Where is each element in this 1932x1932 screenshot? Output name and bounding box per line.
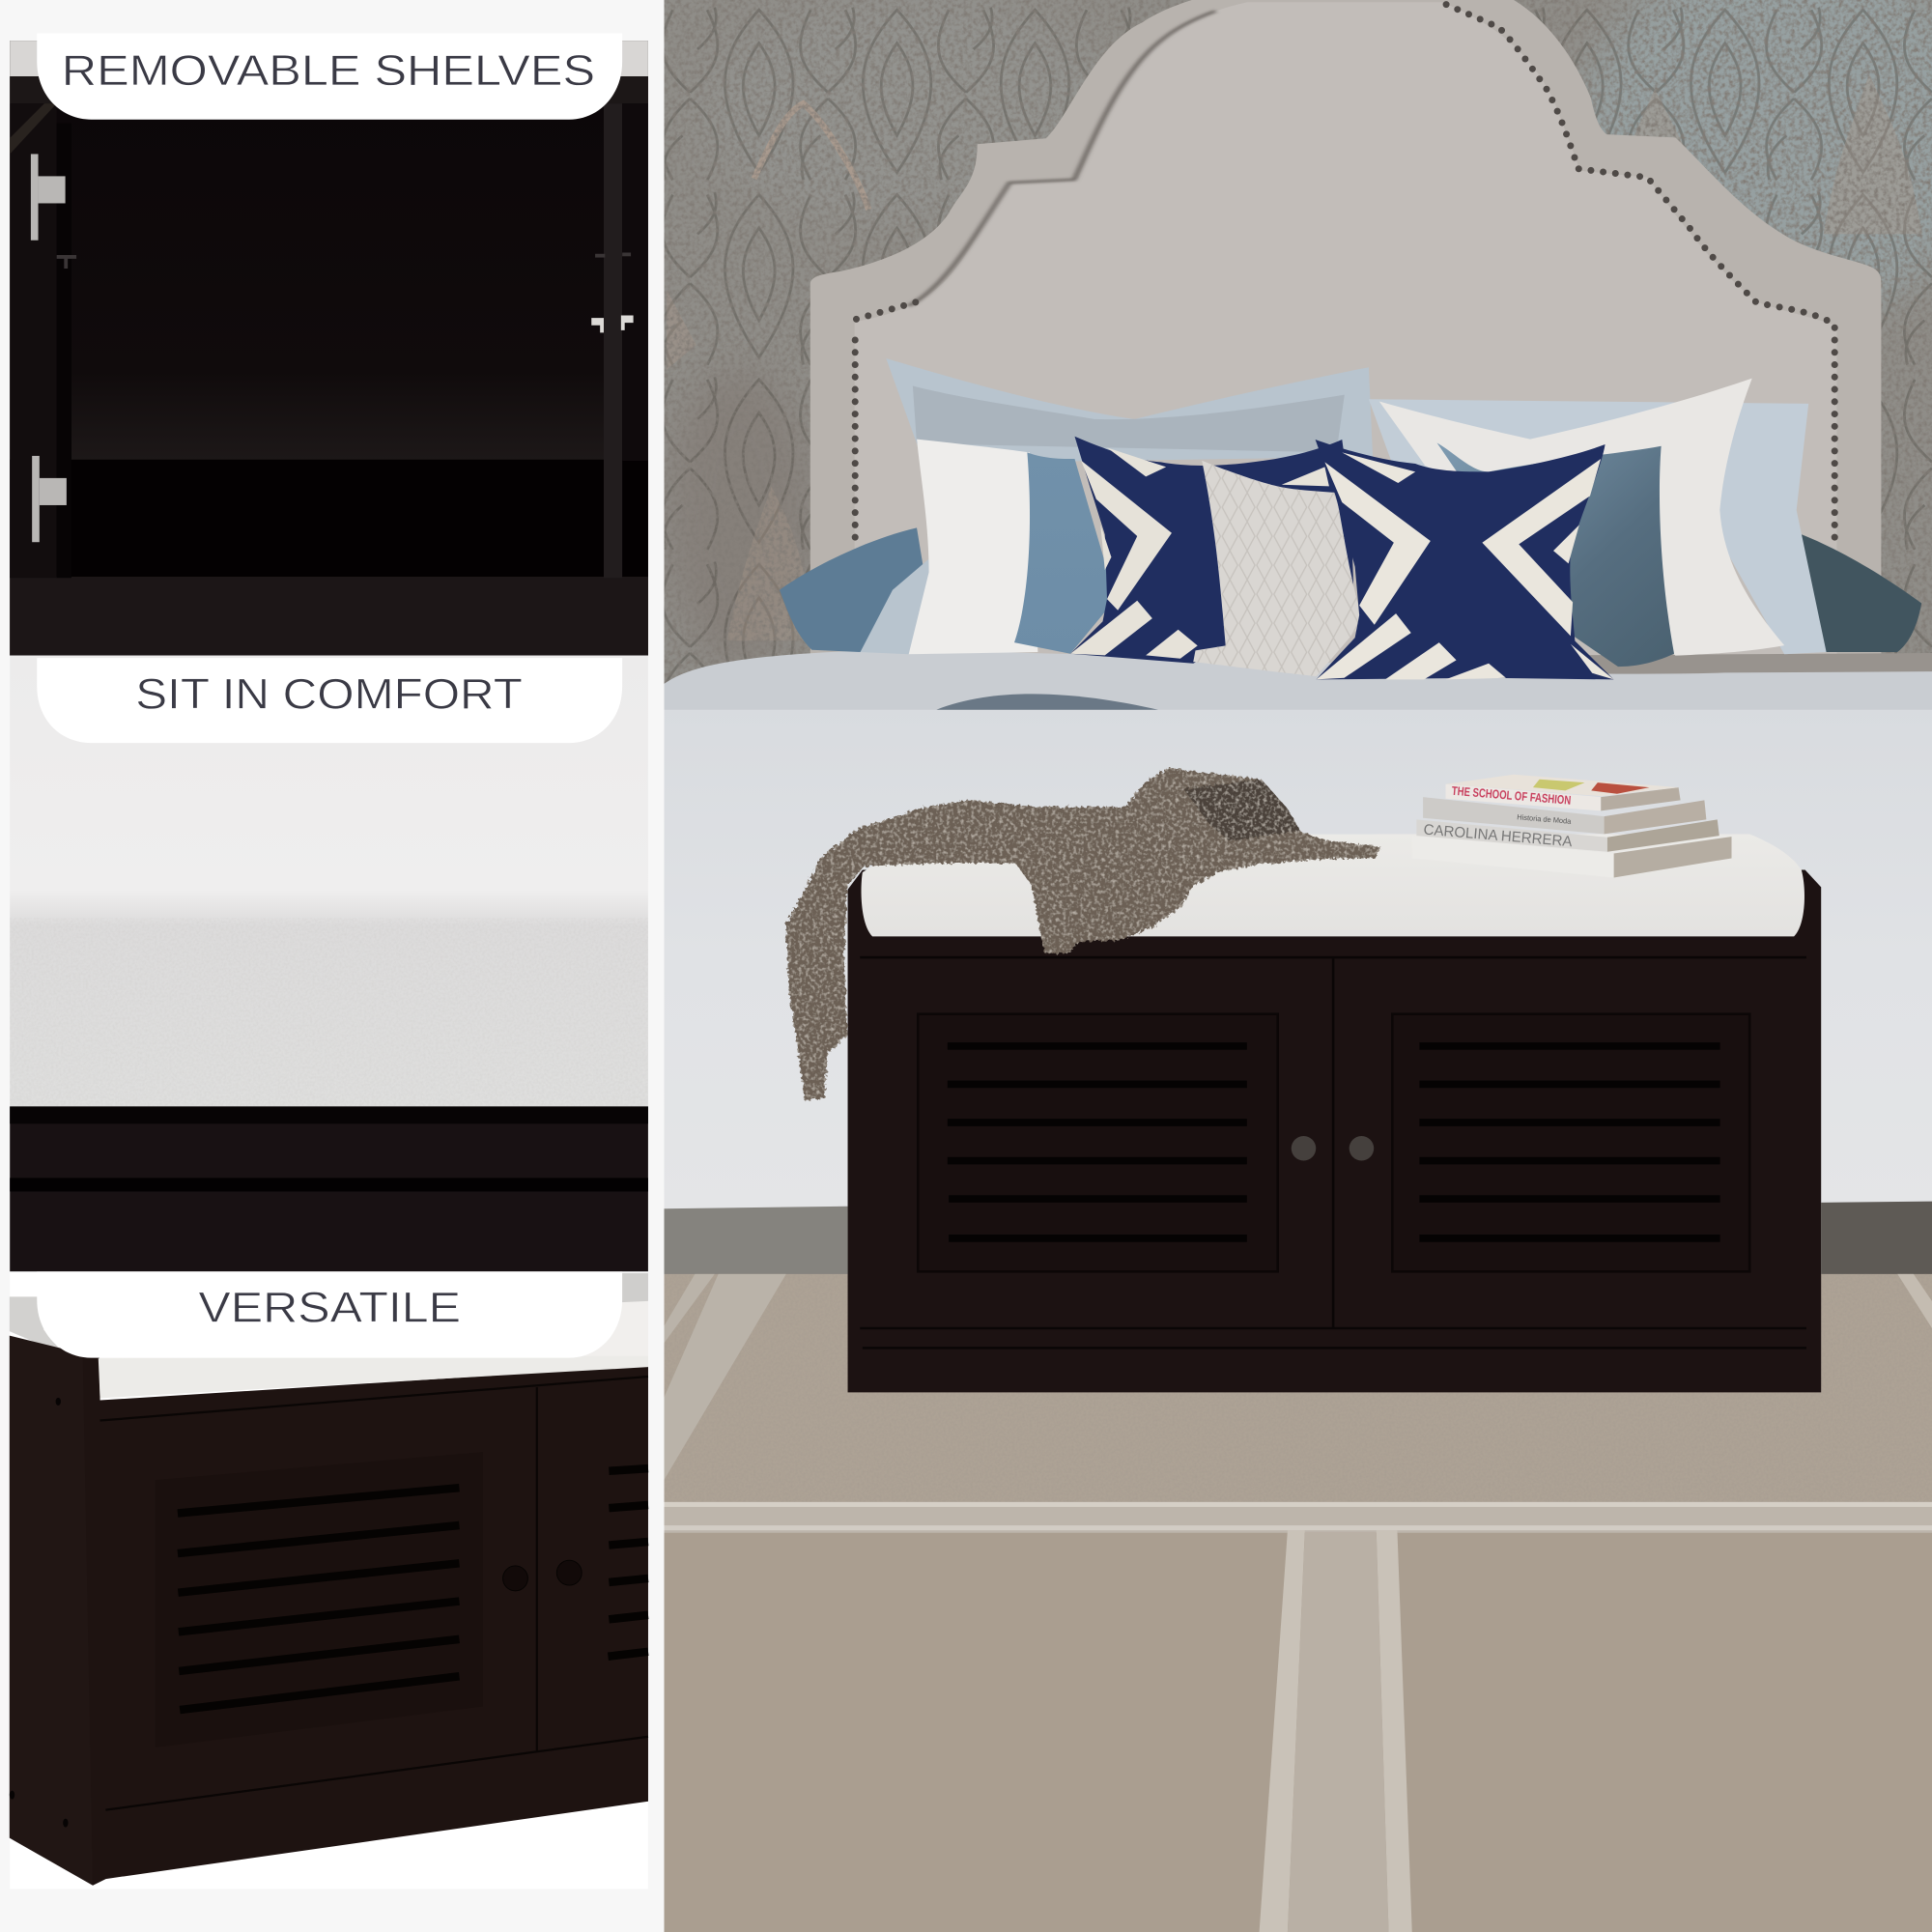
storage bench xyxy=(848,835,1821,1392)
book titles: CAROLINA HERRERA xyxy=(1423,822,1574,850)
light sham left xyxy=(861,358,1373,654)
bench side xyxy=(10,1336,105,1886)
white pillow left xyxy=(909,440,1037,654)
book titles: Historia de Moda xyxy=(1517,812,1572,826)
panel: versatile xyxy=(10,1271,648,1889)
screw holes xyxy=(10,1398,69,1828)
louver slats left door xyxy=(178,1488,459,1710)
panel: bedroom photo xyxy=(665,0,1932,1932)
louver slats right door xyxy=(608,1468,648,1657)
seat cushion xyxy=(862,835,1804,936)
label pill: sit in comfort: SIT IN COMFORT xyxy=(135,670,523,718)
throw blanket xyxy=(785,768,1381,1101)
cushion front xyxy=(99,1356,648,1398)
knobs xyxy=(503,1560,582,1591)
door seams xyxy=(100,1377,648,1810)
duvet and bedding xyxy=(665,650,1932,1276)
back pillows and shams xyxy=(780,358,1921,656)
sham inner xyxy=(913,385,1345,452)
bench front xyxy=(83,1357,648,1886)
pillows xyxy=(780,358,1921,679)
book titles xyxy=(1423,783,1574,850)
door louvers left xyxy=(918,1014,1278,1271)
wallpaper xyxy=(665,0,1932,690)
label pill: versatile xyxy=(37,1271,622,1358)
blue pillow right xyxy=(1437,442,1674,667)
blue pillow left xyxy=(1014,452,1116,654)
textured pillow centre xyxy=(1193,461,1364,676)
navy pillow left xyxy=(1070,437,1355,664)
headboard xyxy=(810,0,1881,692)
rug xyxy=(665,1274,1932,1932)
cushion close-up xyxy=(10,656,648,1106)
label pill: sit in comfort xyxy=(37,658,622,743)
white pillow right xyxy=(1379,379,1784,656)
label pill: removable shelves xyxy=(37,33,622,120)
panel: sit in comfort xyxy=(10,656,648,1271)
bench perspective view xyxy=(10,1273,648,1886)
front pillows xyxy=(1014,437,1674,679)
nailhead trim xyxy=(855,3,1834,537)
book titles: THE SCHOOL OF FASHION xyxy=(1451,783,1572,808)
light sham right xyxy=(1369,399,1827,654)
door louvers right xyxy=(1392,1014,1749,1271)
shelf clips xyxy=(591,316,634,332)
label pill: versatile: VERSATILE xyxy=(198,1285,461,1332)
panel: removable shelves xyxy=(10,33,648,656)
inset panel xyxy=(156,1452,483,1747)
bench rail lines xyxy=(860,957,1806,1348)
hinge lower xyxy=(32,456,67,542)
hinge upper xyxy=(31,154,66,241)
cabinet interior xyxy=(10,41,648,656)
navy pillow right xyxy=(1316,440,1614,679)
label pill: removable shelves: REMOVABLE SHELVES xyxy=(62,47,595,95)
upper shelf pegs xyxy=(57,252,631,269)
book stack xyxy=(1412,775,1732,877)
knobs xyxy=(1292,1136,1374,1161)
bench edge xyxy=(10,1106,648,1271)
